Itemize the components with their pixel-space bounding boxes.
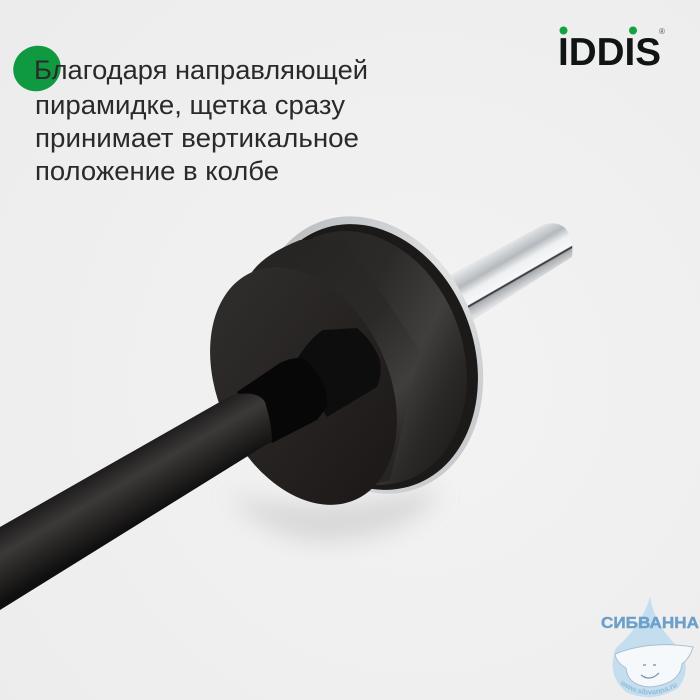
- bathtub: [615, 645, 693, 687]
- website: www.sibvanna.ru: [621, 681, 678, 694]
- soft shadow: [230, 490, 440, 542]
- product: drain brush holder: [0, 184, 572, 610]
- watermark: Сибванна: [601, 598, 699, 698]
- description text: [34, 55, 368, 186]
- socket hole: [237, 358, 327, 443]
- logo: IDDIS: IDDIS: [558, 31, 661, 74]
- rubber rim: [222, 193, 514, 521]
- brand name: СИБВАННА: [601, 615, 699, 632]
- tub face: [641, 665, 659, 678]
- description text: пирамидке, щетка сразу: [35, 90, 346, 120]
- stem socket groove: [295, 328, 381, 417]
- chrome rod: [445, 223, 572, 323]
- green circle accent: [6, 38, 68, 99]
- front face: [174, 237, 433, 535]
- black handle: [0, 394, 272, 610]
- description text: положение в колбе: [35, 156, 279, 186]
- rubber cone: [223, 201, 501, 515]
- chrome flange: [217, 184, 521, 526]
- description text: принимает вертикальное: [35, 123, 359, 153]
- logo: IDDIS: ®: [659, 27, 665, 36]
- description text: Благодаря направляющей: [34, 55, 368, 85]
- water drop: [613, 597, 686, 697]
